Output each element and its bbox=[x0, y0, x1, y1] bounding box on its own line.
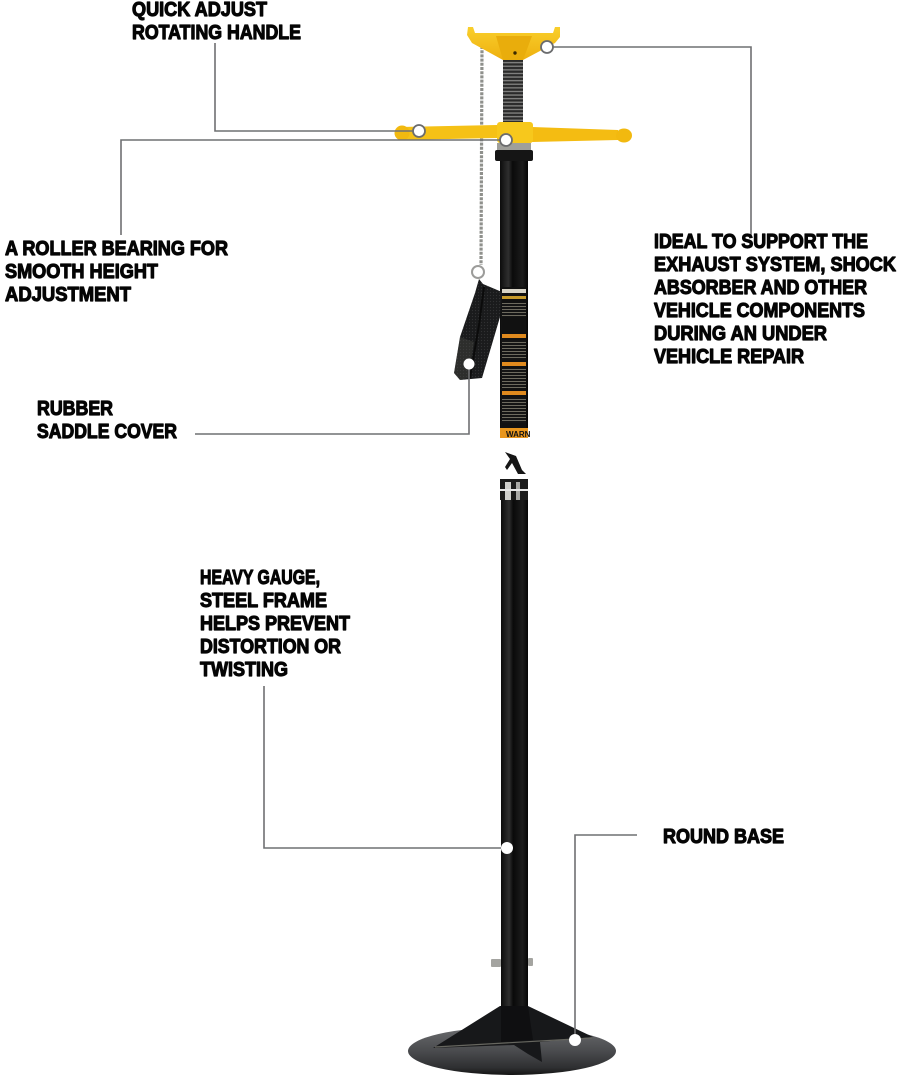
chain bbox=[481, 46, 482, 265]
yellow top saddle bbox=[467, 27, 560, 60]
leader line bbox=[195, 364, 469, 434]
label: SADDLE COVER bbox=[37, 421, 177, 443]
marker bbox=[413, 125, 425, 137]
label: ROUND BASE bbox=[663, 826, 784, 848]
leader line bbox=[121, 140, 506, 235]
marker bbox=[501, 842, 513, 854]
round base disc bbox=[408, 1027, 616, 1075]
marker bbox=[500, 134, 512, 146]
jack stand product bbox=[394, 27, 632, 1075]
ring bbox=[472, 266, 484, 278]
callout: quick adjust rotating handle bbox=[132, 0, 425, 137]
label: DURING AN UNDER bbox=[654, 323, 828, 345]
bolts bbox=[491, 958, 533, 967]
threaded screw bbox=[503, 58, 523, 124]
label: STEEL FRAME bbox=[200, 590, 327, 612]
label: A ROLLER BEARING FOR bbox=[5, 238, 229, 260]
label: VEHICLE REPAIR bbox=[654, 346, 804, 368]
warning label bbox=[500, 287, 531, 500]
label: ROTATING HANDLE bbox=[132, 22, 301, 44]
yellow adjusting handle bbox=[394, 122, 632, 143]
marker bbox=[464, 358, 474, 370]
label: TWISTING bbox=[200, 659, 288, 681]
leader line bbox=[264, 686, 507, 848]
warning label: WARN bbox=[506, 430, 531, 439]
label: ADJUSTMENT bbox=[5, 284, 131, 306]
label: SMOOTH HEIGHT bbox=[5, 261, 158, 283]
callout: heavy gauge steel frame bbox=[200, 567, 513, 854]
leader line bbox=[547, 47, 751, 235]
label: DISTORTION OR bbox=[200, 636, 341, 658]
marker bbox=[541, 41, 553, 53]
label: HELPS PREVENT bbox=[200, 613, 350, 635]
lower steel tube bbox=[501, 490, 528, 1020]
label: RUBBER bbox=[37, 398, 113, 420]
upper tube bbox=[500, 160, 528, 490]
callout: roller bearing bbox=[5, 134, 512, 306]
rubber saddle cover bbox=[454, 279, 502, 380]
label: HEAVY GAUGE, bbox=[200, 567, 320, 589]
callout: rubber saddle cover bbox=[37, 358, 474, 443]
marker bbox=[569, 1034, 581, 1046]
callout: ideal to support bbox=[541, 41, 897, 368]
bearing and black collar bbox=[495, 143, 533, 161]
callout: round base bbox=[569, 826, 784, 1046]
leader line bbox=[575, 835, 637, 1040]
leader line bbox=[215, 43, 419, 131]
label: ABSORBER AND OTHER bbox=[654, 277, 867, 299]
label: IDEAL TO SUPPORT THE bbox=[654, 231, 868, 253]
label: VEHICLE COMPONENTS bbox=[654, 300, 865, 322]
triangular gusset bbox=[433, 1006, 593, 1062]
